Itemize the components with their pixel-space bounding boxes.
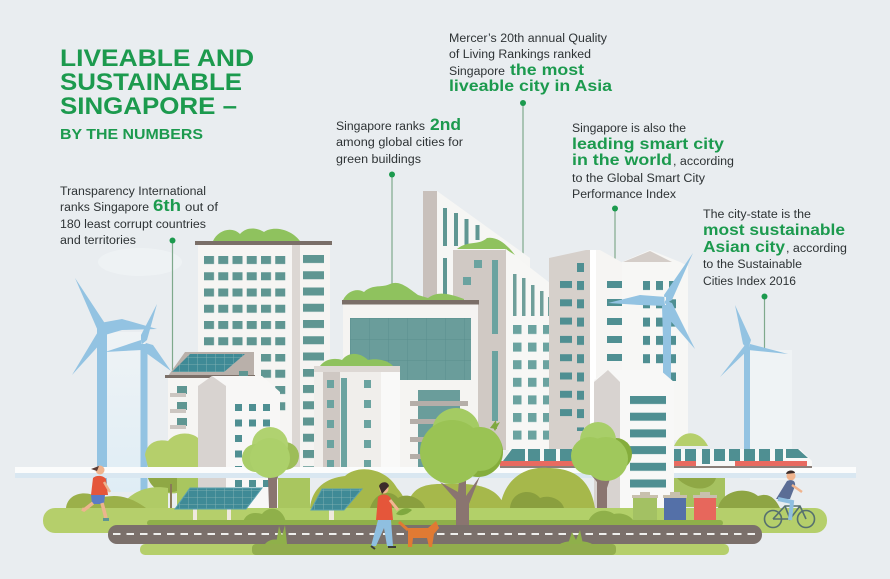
callout: Transparency International: and territories — [60, 235, 136, 247]
translucent background tower left — [105, 332, 145, 492]
grass verge above road — [147, 520, 723, 526]
callout: Mercer ranking: of Living Rankings ranked — [449, 49, 591, 61]
tree: right — [571, 422, 632, 508]
tree: big centre — [420, 408, 503, 543]
callout: smart city: Performance Index — [572, 189, 676, 201]
bush near runner — [66, 493, 146, 508]
lower verge — [140, 544, 729, 555]
central building: rooftop garden — [343, 283, 464, 300]
low front building — [314, 366, 400, 476]
cyclist — [764, 470, 814, 528]
callout: Transparency International: ranks Singapore — [60, 202, 149, 214]
lawn left — [43, 508, 303, 533]
wind turbine 1 — [72, 278, 157, 491]
callout: sustainable: most sustainable — [703, 222, 845, 239]
tall apartment block — [195, 241, 332, 475]
callout: green buildings: Singapore ranks — [336, 121, 425, 133]
leader line: liveable — [522, 102, 524, 270]
bush at far right — [718, 491, 780, 508]
wind turbine 3 — [608, 253, 695, 380]
callout: sustainable: to the Sustainable — [703, 259, 802, 271]
pale cloud — [98, 248, 182, 276]
dog — [399, 521, 439, 547]
callout: Mercer ranking: liveable city in Asia — [449, 78, 612, 95]
right apartment building — [549, 250, 632, 470]
callout: smart city: in the world — [572, 152, 672, 169]
title: SINGAPORE – — [60, 93, 237, 120]
background bush behind tree left — [278, 478, 310, 508]
tall block: rooftop garden — [213, 228, 300, 241]
lawn right — [600, 508, 827, 533]
hedge inner shadows — [370, 492, 564, 508]
leader line: corruption — [172, 240, 174, 372]
callout: smart city: , according — [673, 156, 734, 168]
solar roof building — [165, 352, 255, 470]
back right tree and bush — [674, 433, 725, 507]
translucent background tower right — [750, 350, 792, 480]
callout: green buildings: green buildings — [336, 154, 421, 166]
train — [500, 449, 812, 468]
tree: small left — [242, 427, 299, 508]
recycling bin blue — [663, 492, 687, 520]
recycling bin red — [693, 492, 717, 520]
callout: sustainable: Asian city — [703, 239, 785, 256]
far right building — [622, 250, 688, 440]
callout: sustainable — [703, 209, 847, 288]
callout: Transparency International: out of — [185, 202, 219, 214]
ground solar panel left — [175, 488, 262, 520]
callout: sustainable: , according — [786, 243, 847, 255]
recycling bin green — [632, 492, 658, 520]
wind turbine 4 — [720, 305, 788, 477]
callout: green buildings: among global cities for — [336, 137, 463, 149]
callout: smart city: to the Global Smart City — [572, 173, 705, 185]
low building: rooftop garden — [320, 354, 393, 366]
callout: Mercer ranking: the most — [510, 62, 585, 79]
front white building left — [198, 376, 280, 510]
front right building — [594, 370, 674, 512]
leaves from bush at dog — [396, 508, 412, 515]
callout: smart city: Singapore is also the — [572, 123, 686, 135]
road — [108, 525, 762, 544]
light bush beside runner — [120, 487, 168, 508]
lower verge dark section — [252, 544, 616, 555]
callout: Transparency International — [60, 186, 219, 247]
callout: Mercer ranking: Mercer’s 20th annual Quality — [449, 33, 607, 45]
hedge bushes centre — [310, 468, 595, 508]
leader line: green buildings — [391, 174, 393, 285]
callout: Mercer ranking — [449, 33, 612, 95]
title: LIVEABLE AND — [60, 45, 254, 72]
runner — [82, 466, 110, 521]
callout: Transparency International: Transparency International — [60, 186, 206, 198]
shrub on verge — [243, 509, 286, 522]
central glass building — [342, 300, 479, 474]
title — [60, 45, 254, 143]
callout: green buildings — [336, 115, 463, 166]
callout: green buildings: 2nd — [430, 115, 461, 134]
grass strip centre — [250, 508, 660, 521]
back left tree — [145, 433, 198, 510]
callout: smart city: leading smart city — [572, 136, 724, 153]
ground solar panel right — [311, 489, 362, 520]
title: BY THE NUMBERS — [60, 126, 203, 143]
callout: sustainable: The city-state is the — [703, 209, 811, 221]
callout: Transparency International: 6th — [153, 196, 181, 215]
grass tufts — [265, 525, 592, 544]
marker dots — [170, 100, 768, 300]
elevated track — [15, 467, 856, 508]
callout: smart city — [572, 123, 734, 201]
wind turbine 2 — [105, 304, 171, 492]
leader line: sustainable — [764, 296, 766, 350]
walking woman — [371, 482, 398, 549]
tower: grey and white block — [453, 249, 559, 450]
tower: rooftop garden — [457, 238, 515, 255]
leader line: smart city — [614, 208, 616, 264]
callout: sustainable: Cities Index 2016 — [703, 276, 796, 288]
title: SUSTAINABLE — [60, 69, 242, 96]
tower: stepped slit building — [423, 191, 530, 440]
callout: Transparency International: 180 least corrupt countries — [60, 219, 206, 231]
callout: Mercer ranking: Singapore — [449, 66, 505, 78]
shrub on verge right — [588, 511, 634, 522]
